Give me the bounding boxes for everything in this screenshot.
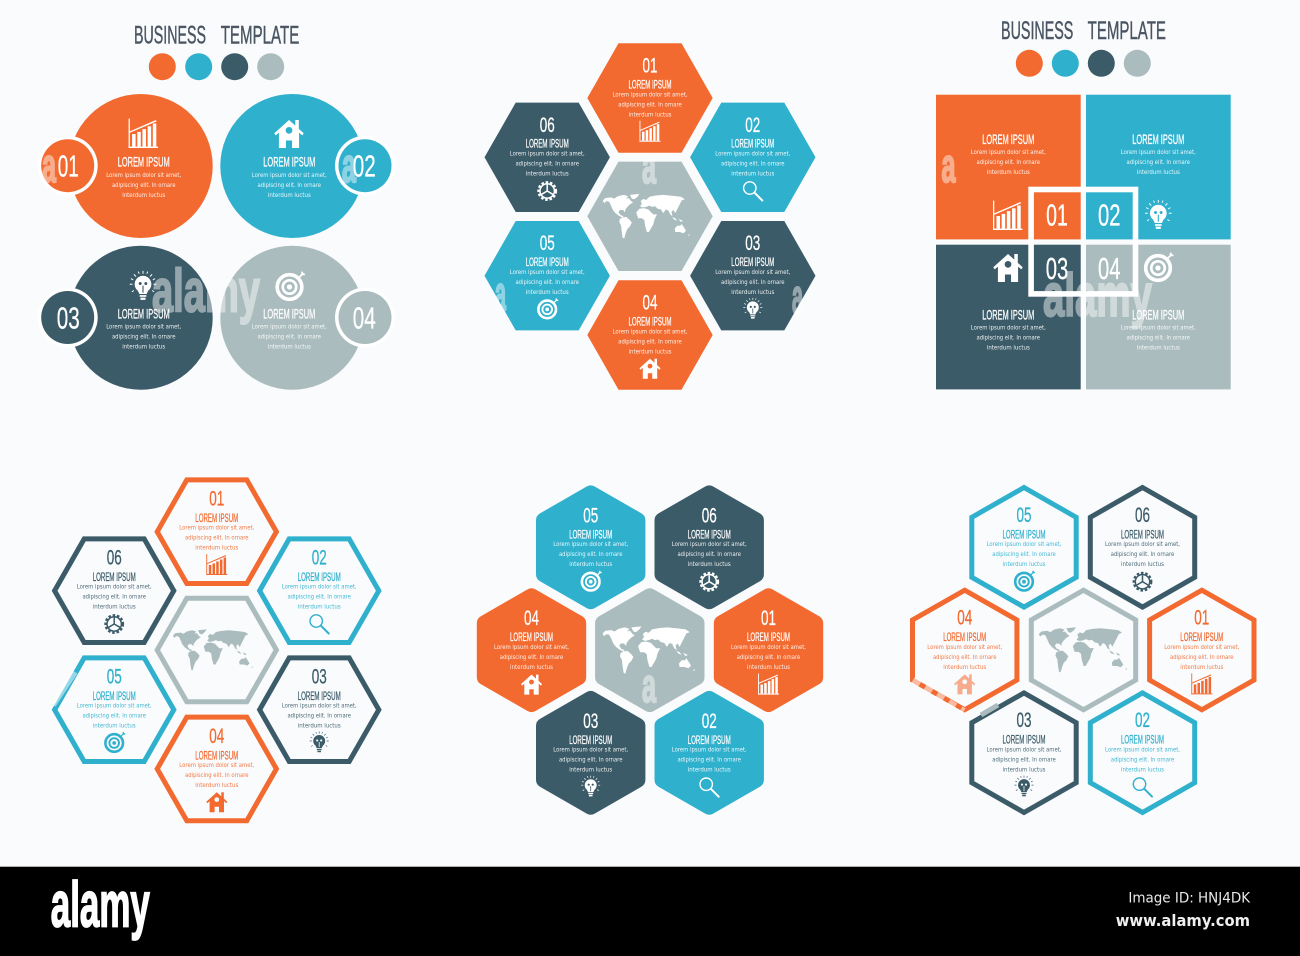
centre frame with numbers: 01 [1046, 198, 1068, 233]
circle 01: LOREM IPSUM [118, 154, 170, 170]
hexagon 06 [662, 493, 756, 601]
hexagon 05 [544, 493, 637, 601]
hexagon 05: adipiscing elit. In ornare [992, 552, 1056, 558]
icon: house [993, 254, 1023, 282]
circle 04: 04 [353, 300, 376, 336]
hexagon 03: 03 [1016, 709, 1032, 732]
hexagon 02: adipiscing elit. In ornare [287, 595, 351, 601]
square 03: interdum luctus [987, 346, 1030, 352]
hexagon 03 [972, 693, 1076, 812]
hexagon 03: Lorem ipsum dolor sit amet, [282, 704, 357, 710]
icon: target [1015, 571, 1035, 590]
watermark overlays: a [792, 271, 803, 324]
circle 04: interdum luctus [268, 344, 311, 350]
hexagon 01: interdum luctus [747, 665, 790, 671]
icon: light bulb [1145, 200, 1172, 229]
hexagon 04: adipiscing elit. In ornare [500, 655, 564, 661]
hexagon 02: interdum luctus [1121, 768, 1164, 774]
hexagon 02 [1090, 693, 1195, 812]
icon: light bulb [743, 298, 762, 319]
hexagon 06 [1090, 488, 1195, 607]
hexagon 03: Lorem ipsum dolor sit amet, [715, 270, 790, 276]
hexagon 03 [544, 699, 637, 807]
hexagon 04: adipiscing elit. In ornare [933, 655, 997, 661]
hexagon 01: 01 [642, 54, 658, 78]
hexagon 03 [260, 658, 379, 762]
hexagon 03: adipiscing elit. In ornare [559, 758, 623, 764]
hexagon 03: Lorem ipsum dolor sit amet, [986, 748, 1062, 754]
hexagon 02: Lorem ipsum dolor sit amet, [672, 748, 747, 754]
hexagon 04 [587, 280, 713, 390]
hexagon 05: adipiscing elit. In ornare [515, 280, 579, 286]
hexagon 03: adipiscing elit. In ornare [287, 714, 351, 720]
hexagon 01: Lorem ipsum dolor sit amet, [179, 526, 254, 532]
hexagon 02: adipiscing elit. In ornare [721, 162, 785, 168]
square 01: Lorem ipsum dolor sit amet, [971, 150, 1046, 156]
watermark overlays: a [942, 140, 956, 193]
footer bar [0, 867, 1300, 956]
icon: target [105, 732, 125, 752]
icon: house [954, 674, 975, 694]
icon: house [274, 120, 304, 148]
hexagon 02 [690, 103, 816, 212]
square 04: adipiscing elit. In ornare [1127, 336, 1190, 342]
hexagon 06: LOREM IPSUM [93, 570, 136, 584]
square 03: LOREM IPSUM [982, 307, 1034, 323]
hexagon 05: Lorem ipsum dolor sit amet, [553, 542, 628, 548]
hexagon 01: adipiscing elit. In ornare [185, 536, 249, 542]
hexagon 02 [662, 699, 756, 807]
hexagon 01: Lorem ipsum dolor sit amet, [731, 645, 806, 651]
hexagon 04: 04 [642, 292, 658, 314]
hexagon 01: interdum luctus [195, 546, 238, 552]
square 02: LOREM IPSUM [1132, 131, 1184, 147]
icon: house [206, 792, 227, 812]
icon: gear [538, 182, 556, 200]
hexagon 03: interdum luctus [731, 290, 774, 296]
hexagon 01: LOREM IPSUM [747, 630, 790, 644]
hexagon 06: interdum luctus [93, 605, 136, 611]
icon: light bulb [581, 776, 600, 796]
icon: bar chart [993, 201, 1022, 230]
hexagon 06: adipiscing elit. In ornare [1111, 552, 1175, 558]
circle 02: adipiscing elit. In ornare [258, 183, 321, 189]
circle 03: Lorem ipsum dolor sit amet, [106, 324, 181, 330]
hexagon 02: 02 [1135, 709, 1150, 732]
hexagon 04 [485, 596, 578, 704]
hexagon 04: interdum luctus [510, 665, 553, 671]
hexagon 06: interdum luctus [526, 172, 569, 178]
icon: bar chart [758, 674, 779, 695]
hexagon 01: 01 [209, 488, 224, 511]
hexagon 05: adipiscing elit. In ornare [82, 714, 146, 720]
hexagon 05: interdum luctus [526, 290, 569, 296]
square 04: Lorem ipsum dolor sit amet, [1121, 326, 1196, 332]
hexagon 06: adipiscing elit. In ornare [515, 162, 579, 168]
hexagon 06: LOREM IPSUM [1121, 527, 1164, 541]
icon: bar chart [129, 119, 158, 148]
centre frame with numbers: 02 [1098, 198, 1121, 233]
icon: light bulb [130, 271, 156, 300]
hexagon 04: 04 [209, 725, 225, 748]
icon: bar chart [206, 554, 227, 575]
watermark overlays: a [342, 140, 356, 193]
circle 04: adipiscing elit. In ornare [258, 334, 321, 340]
hexagon 06: 06 [702, 504, 717, 527]
panel: outlined flat hexagons [55, 480, 379, 821]
centre frame with numbers: 04 [1098, 251, 1121, 286]
hexagon 01: Lorem ipsum dolor sit amet, [612, 92, 688, 98]
hexagon 01 [587, 43, 713, 153]
square 04 [1086, 245, 1231, 389]
hexagon 05: Lorem ipsum dolor sit amet, [77, 704, 152, 710]
watermark overlays [42, 140, 1152, 715]
hexagon 06: 06 [1135, 504, 1150, 527]
hexagon 03: Lorem ipsum dolor sit amet, [553, 748, 628, 754]
circle 01: interdum luctus [122, 193, 165, 199]
hexagon 05 [484, 221, 610, 330]
hexagon 03: 03 [312, 666, 327, 689]
hexagon 01: adipiscing elit. In ornare [737, 655, 801, 661]
hexagon 06: Lorem ipsum dolor sit amet, [672, 542, 747, 548]
icon: gear [1134, 573, 1151, 590]
hexagon 01: adipiscing elit. In ornare [1170, 655, 1234, 661]
icon: magnifier [310, 615, 329, 634]
hexagon 05: Lorem ipsum dolor sit amet, [986, 542, 1062, 548]
hexagon 04 [157, 717, 276, 821]
hexagon 02: LOREM IPSUM [688, 733, 731, 747]
circle 03: LOREM IPSUM [118, 306, 170, 322]
panel: outlined pointed hexagons [912, 488, 1254, 812]
square 02: interdum luctus [1137, 170, 1180, 176]
hexagon 03: adipiscing elit. In ornare [721, 280, 785, 286]
hexagon 04: LOREM IPSUM [943, 630, 986, 644]
circle 02 [220, 94, 395, 238]
hexagon 02: 02 [312, 547, 327, 570]
hexagon 05: LOREM IPSUM [93, 689, 136, 703]
colour legend dots [149, 53, 284, 80]
icon: target [1146, 253, 1173, 280]
hexagon 06: LOREM IPSUM [526, 137, 569, 151]
square 04: interdum luctus [1137, 346, 1180, 352]
hexagon 06: adipiscing elit. In ornare [677, 552, 741, 558]
hexagon 04: LOREM IPSUM [628, 314, 672, 328]
watermark overlays: a [495, 268, 506, 321]
hexagon 05: Lorem ipsum dolor sit amet, [510, 270, 585, 276]
panel: filled flat hexagons [484, 43, 816, 390]
hexagon 01: 01 [1194, 606, 1209, 630]
square 01: interdum luctus [987, 170, 1030, 176]
watermark overlays: alamy [152, 258, 260, 325]
hexagon 01: Lorem ipsum dolor sit amet, [1164, 645, 1239, 651]
icon: bar chart [1191, 673, 1212, 694]
circle 03: interdum luctus [122, 344, 165, 350]
hexagon 02: Lorem ipsum dolor sit amet, [282, 585, 357, 591]
image id: Image ID: HNJ4DK [1128, 891, 1250, 907]
heading: business template: TEMPLATE [221, 21, 299, 49]
hexagon 06: interdum luctus [1121, 562, 1164, 568]
hexagon 03 [690, 221, 816, 330]
icon: gear [105, 615, 123, 633]
hexagon 01: adipiscing elit. In ornare [618, 102, 682, 108]
hexagon 04: adipiscing elit. In ornare [185, 773, 249, 779]
heading: business template: TEMPLATE [1088, 17, 1166, 45]
hexagon 04 [912, 590, 1017, 710]
circle 03: 03 [57, 300, 80, 336]
hexagon 05: LOREM IPSUM [569, 527, 612, 541]
hexagon 05: LOREM IPSUM [1002, 527, 1046, 541]
icon: bar chart [640, 121, 660, 142]
hexagon 01 [1150, 590, 1254, 710]
square 01: LOREM IPSUM [982, 131, 1034, 147]
hexagon 03: interdum luctus [1002, 768, 1046, 774]
hexagon 06: Lorem ipsum dolor sit amet, [1105, 542, 1180, 548]
circle 01 [38, 94, 213, 238]
hexagon 01 [157, 480, 276, 584]
circle 01: Lorem ipsum dolor sit amet, [106, 173, 181, 179]
hexagon 02: Lorem ipsum dolor sit amet, [1105, 748, 1180, 754]
hexagon 04: Lorem ipsum dolor sit amet, [179, 763, 254, 769]
hexagon 04: Lorem ipsum dolor sit amet, [927, 645, 1002, 651]
heading: business template: BUSINESS [134, 21, 206, 49]
hexagon 04: LOREM IPSUM [510, 630, 553, 644]
hexagon 02: LOREM IPSUM [298, 570, 341, 584]
square 02: Lorem ipsum dolor sit amet, [1121, 150, 1196, 156]
watermark overlays: a [42, 140, 56, 193]
circle 01: adipiscing elit. In ornare [112, 183, 176, 189]
colour legend dots [1016, 50, 1151, 77]
hexagon 04: Lorem ipsum dolor sit amet, [494, 645, 569, 651]
circle 04: LOREM IPSUM [263, 306, 315, 322]
hexagon 06: adipiscing elit. In ornare [82, 595, 146, 601]
hexagon 06: LOREM IPSUM [688, 527, 731, 541]
icon: gear [700, 573, 718, 590]
panel: filled rounded hexagons [485, 493, 815, 807]
hexagon 06: 06 [540, 114, 555, 137]
circle 04 [220, 246, 395, 390]
hexagon 05 [972, 488, 1076, 607]
circle 02: LOREM IPSUM [263, 154, 315, 170]
hexagon 03: interdum luctus [298, 724, 341, 730]
hexagon 04: interdum luctus [628, 349, 672, 355]
hexagon 03: 03 [583, 710, 598, 733]
hexagon 01: LOREM IPSUM [628, 77, 672, 91]
circle 02: 02 [353, 149, 376, 184]
icon: target [277, 272, 305, 299]
hexagon 05: 05 [583, 504, 598, 527]
heading: business template: BUSINESS [1001, 17, 1073, 45]
hexagon 04: interdum luctus [943, 665, 986, 671]
icon: magnifier [1133, 778, 1152, 797]
hexagon 06 [484, 103, 610, 212]
hexagon 05: interdum luctus [569, 562, 612, 568]
alamy logo: alamy [51, 869, 150, 941]
hexagon 05: LOREM IPSUM [526, 255, 569, 269]
hexagon 02: 02 [702, 710, 717, 733]
circle 02: interdum luctus [268, 193, 311, 199]
square 02 [1086, 95, 1231, 239]
hexagon 05 [55, 658, 174, 762]
icon: light bulb [310, 732, 329, 752]
hexagon 06: Lorem ipsum dolor sit amet, [77, 585, 152, 591]
hexagon 02 [260, 539, 379, 642]
circle 03 [38, 246, 213, 390]
hexagon 01: interdum luctus [628, 112, 672, 118]
icon: house [521, 675, 542, 695]
icon: house [640, 359, 660, 379]
website: www.alamy.com [1116, 911, 1250, 930]
hexagon 02: interdum luctus [731, 172, 774, 178]
hexagon 04: LOREM IPSUM [195, 748, 238, 762]
square 03: adipiscing elit. In ornare [977, 336, 1040, 342]
icon: magnifier [744, 182, 762, 200]
hexagon 03: LOREM IPSUM [1002, 733, 1046, 747]
square 03: Lorem ipsum dolor sit amet, [971, 326, 1046, 332]
hexagon 05: 05 [107, 666, 122, 689]
square 01 [936, 95, 1081, 239]
square 01: adipiscing elit. In ornare [977, 160, 1040, 166]
icon: magnifier [700, 778, 719, 797]
hexagon 04: adipiscing elit. In ornare [618, 339, 682, 345]
centre hexagon with world map [1031, 590, 1136, 710]
hexagon 03: 03 [745, 232, 760, 255]
hexagon 02: adipiscing elit. In ornare [677, 758, 741, 764]
hexagon 02: LOREM IPSUM [731, 137, 774, 151]
hexagon 01: 01 [761, 607, 776, 630]
circle 02: Lorem ipsum dolor sit amet, [252, 173, 327, 179]
circle 03: adipiscing elit. In ornare [112, 334, 176, 340]
hexagon 02: 02 [745, 114, 760, 137]
hexagon 02: interdum luctus [688, 768, 731, 774]
watermark overlays: alamy [1043, 262, 1152, 329]
hexagon 01: interdum luctus [1180, 665, 1223, 671]
hexagon 01: LOREM IPSUM [1180, 630, 1223, 644]
hexagon 03: LOREM IPSUM [298, 689, 341, 703]
centre frame with numbers: 03 [1046, 251, 1068, 286]
hexagon 05: interdum luctus [93, 724, 136, 730]
hexagon 06: interdum luctus [688, 562, 731, 568]
icon: light bulb [1014, 776, 1034, 796]
hexagon 04: 04 [957, 606, 972, 630]
watermark overlays: a [642, 141, 656, 194]
centre frame with numbers [1031, 190, 1136, 294]
watermark overlays: a [642, 660, 656, 713]
hexagon 06: Lorem ipsum dolor sit amet, [510, 152, 585, 158]
hexagon 02: Lorem ipsum dolor sit amet, [715, 152, 790, 158]
icon: target [582, 571, 602, 590]
centre hexagon with world map [603, 596, 696, 704]
icon: target [538, 298, 558, 318]
hexagon 06: 06 [107, 547, 122, 570]
hexagon 02: adipiscing elit. In ornare [1111, 758, 1175, 764]
panel: four circles [38, 21, 395, 390]
hexagon 05: interdum luctus [1002, 562, 1046, 568]
circle 04: Lorem ipsum dolor sit amet, [252, 324, 327, 330]
hexagon 02: interdum luctus [298, 605, 341, 611]
circle 01: 01 [58, 149, 79, 184]
hexagon 02: LOREM IPSUM [1121, 733, 1164, 747]
hexagon 01 [722, 596, 815, 704]
hexagon 05: adipiscing elit. In ornare [559, 552, 623, 558]
hexagon 03: adipiscing elit. In ornare [992, 758, 1056, 764]
centre hexagon with world map [157, 598, 276, 702]
hexagon 04: 04 [524, 607, 539, 630]
centre hexagon with world map [587, 162, 713, 271]
square 04: LOREM IPSUM [1132, 307, 1184, 323]
hexagon 03: LOREM IPSUM [731, 255, 774, 269]
hexagon 05: 05 [1016, 504, 1032, 527]
panel: four squares [936, 17, 1231, 389]
hexagon 04: interdum luctus [195, 783, 238, 789]
hexagon 01: LOREM IPSUM [195, 511, 238, 525]
hexagon 05: 05 [540, 232, 555, 255]
hexagon 04: Lorem ipsum dolor sit amet, [612, 329, 688, 335]
square 03 [936, 245, 1081, 389]
square 02: adipiscing elit. In ornare [1127, 160, 1190, 166]
hexagon 03: interdum luctus [569, 768, 612, 774]
hexagon 06 [55, 539, 174, 642]
hexagon 03: LOREM IPSUM [569, 733, 612, 747]
